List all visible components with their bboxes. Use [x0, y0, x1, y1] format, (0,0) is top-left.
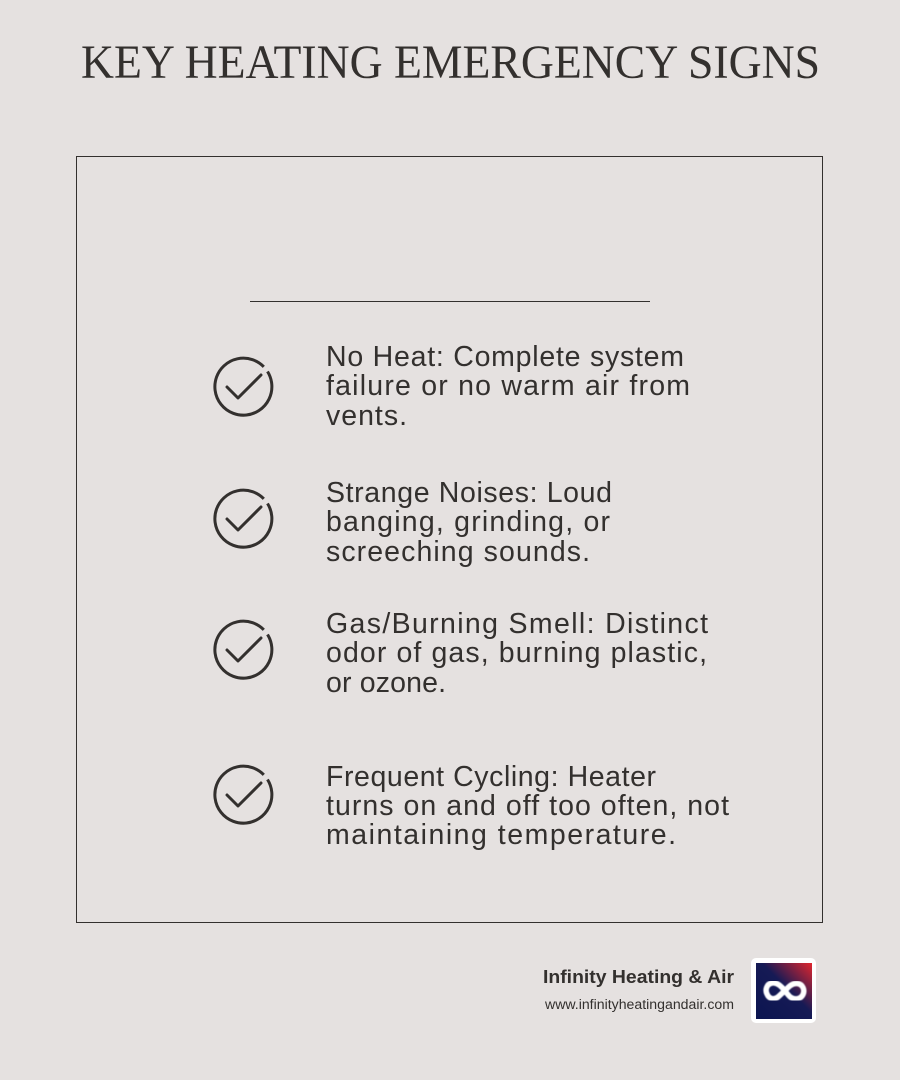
text: frequent cycling	[326, 761, 729, 851]
website url: www.infinityheatingandair.com	[544, 997, 734, 1012]
text: gas or burning smell: Gas/Burning Smell: Distinct	[326, 608, 708, 640]
icon: check circle 1	[215, 358, 272, 415]
text: strange noises: screeching sounds.	[326, 536, 590, 568]
text: strange noises	[326, 477, 612, 568]
text: no heat: vents.	[326, 400, 407, 432]
text: gas or burning smell: or ozone.	[326, 667, 446, 699]
text: frequent cycling: Frequent Cycling: Heater	[326, 761, 656, 793]
icon: check circle 2	[215, 490, 272, 547]
text: gas or burning smell: odor of gas, burning plastic,	[326, 637, 707, 669]
text: no heat	[326, 341, 690, 432]
text: frequent cycling: maintaining temperature.	[326, 819, 676, 851]
text: no heat: failure or no warm air from	[326, 370, 690, 402]
text: gas or burning smell	[326, 608, 708, 699]
text: no heat: No Heat: Complete system	[326, 341, 684, 373]
icon: infinity symbol	[766, 983, 804, 999]
panel: emergency signs	[76, 156, 822, 922]
text: strange noises: Strange Noises: Loud	[326, 477, 612, 509]
title: KEY HEATING EMERGENCY SIGNS	[81, 36, 820, 89]
icon: check circle 3	[215, 621, 272, 678]
logo	[751, 958, 816, 1023]
brand name: Infinity Heating & Air	[543, 966, 734, 987]
icon: check circle 4	[215, 766, 272, 823]
text: strange noises: banging, grinding, or	[326, 506, 610, 538]
text: frequent cycling: turns on and off too often, not	[326, 790, 729, 822]
